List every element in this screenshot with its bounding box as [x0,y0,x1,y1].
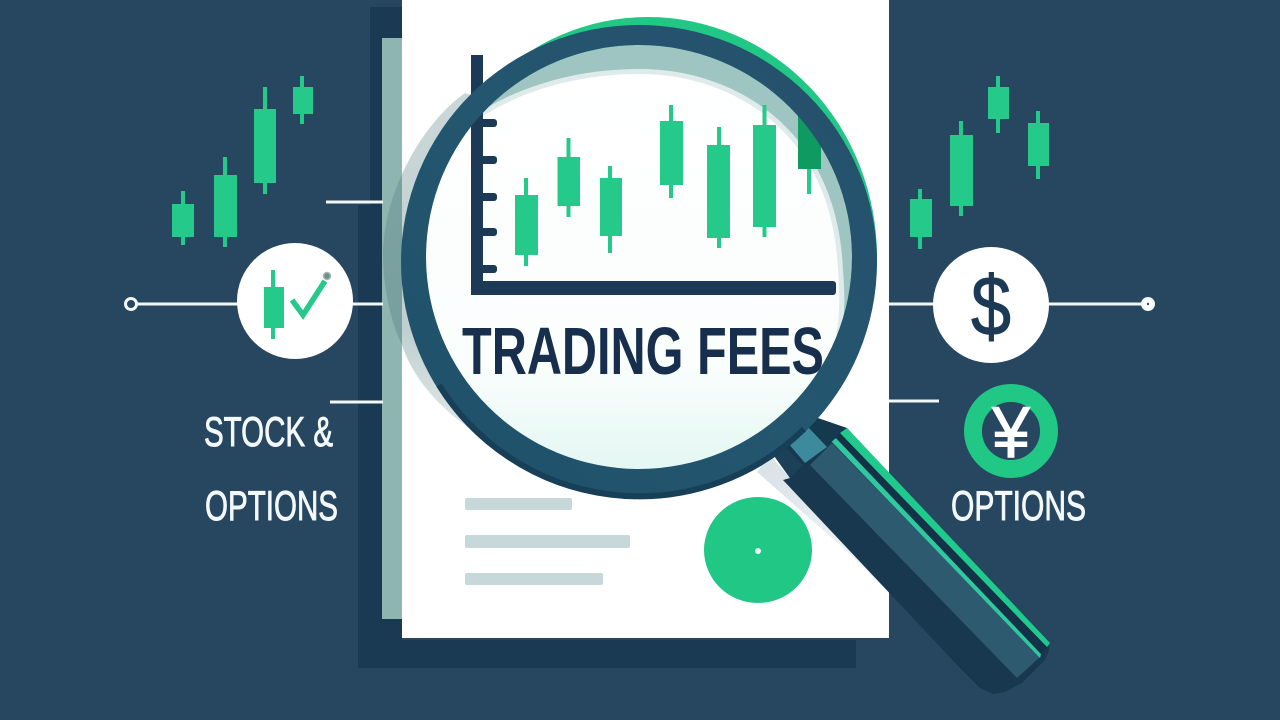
magnifying glass [383,17,1050,694]
handle [772,417,1050,694]
label: stock and options [204,408,338,529]
green rim highlight [419,17,877,497]
ring dark lower edge [439,385,804,496]
glass shadow [383,93,520,430]
lens [415,40,860,480]
placeholder text bars [465,498,630,585]
right connector lines [889,298,1154,401]
icon: yen: ¥ [991,393,1031,473]
handle shadow on page [757,455,889,592]
left candlesticks [172,76,313,247]
left connector lines [126,202,383,402]
title: TRADING FEES [462,314,824,389]
label: options: OPTIONS [951,482,1086,529]
chart axes [471,55,836,295]
icon: dollar [933,247,1049,363]
document stack [358,0,889,668]
candles [526,105,764,266]
right candlesticks [910,76,1049,249]
candlestick chart [471,55,836,295]
icon: candle and check [237,243,353,359]
label: stock and options: STOCK & [204,408,333,455]
back sheet shadow [358,7,856,668]
teal sheet [382,38,404,619]
green seal [704,497,812,603]
lens ring [401,25,877,499]
icon: dollar: $ [971,259,1011,353]
icon: yen [973,393,1049,473]
dark candle [798,110,821,194]
white page [402,0,889,638]
label: stock and options: OPTIONS [205,482,338,529]
